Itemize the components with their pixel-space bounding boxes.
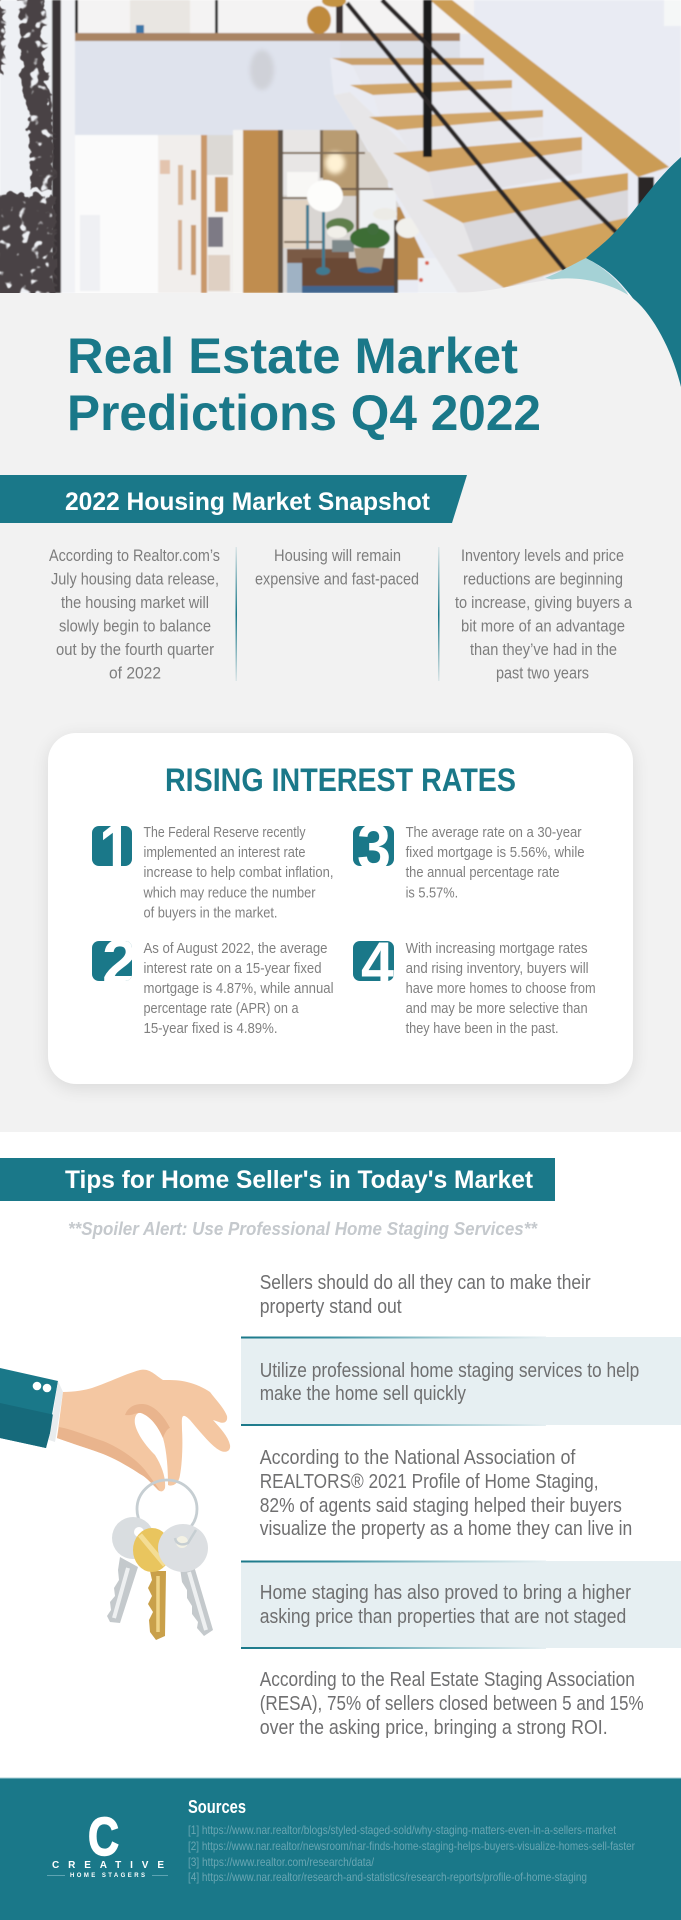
text item 4: they have been in the past. bbox=[406, 1020, 559, 1037]
logo: Creative Home Stagers: CREATIVE bbox=[52, 1860, 164, 1871]
tip 1 text: property stand out bbox=[260, 1296, 402, 1318]
snapshot column 1 text: July housing data release, bbox=[51, 570, 219, 588]
text item 1 bbox=[143, 824, 334, 922]
source list: [4] https://www.nar.realtor/research-and-statistics/research-reports/profile-of-home-staging bbox=[188, 1870, 587, 1884]
tip 5 text bbox=[260, 1669, 644, 1739]
tip 3 text: REALTORS® 2021 Profile of Home Staging, bbox=[260, 1471, 598, 1493]
source list bbox=[188, 1823, 635, 1884]
tip 1 text bbox=[260, 1272, 591, 1318]
text item 2: 15-year fixed is 4.89%. bbox=[144, 1020, 278, 1037]
snapshot column 3 text bbox=[455, 546, 632, 682]
snapshot column divider 2 bbox=[438, 547, 440, 681]
panel heading: RISING INTEREST RATES bbox=[165, 762, 516, 798]
tip 5 text: over the asking price, bringing a strong ROI. bbox=[260, 1717, 608, 1739]
snapshot column 2 text: expensive and fast-paced bbox=[255, 570, 419, 588]
tip 3 text: According to the National Association of bbox=[260, 1447, 576, 1469]
snapshot column 3 text: than they’ve had in the bbox=[470, 640, 617, 659]
text item 3 bbox=[406, 824, 585, 902]
snapshot column 2 text: Housing will remain bbox=[274, 546, 401, 565]
tip 2 highlighted strip: make the home sell quickly bbox=[260, 1383, 466, 1405]
text item 4: and may be more selective than bbox=[406, 1000, 588, 1017]
tip 5 text: According to the Real Estate Staging Association bbox=[260, 1669, 635, 1691]
section banner: 2022 Housing Market Snapshot: 2022 Housing Market Snapshot bbox=[65, 488, 431, 516]
icon: number 1: 1 bbox=[99, 810, 132, 890]
snapshot column 1 text: According to Realtor.com’s bbox=[49, 546, 220, 565]
text item 2: percentage rate (APR) on a bbox=[144, 1000, 299, 1017]
decorative teal wave bbox=[586, 157, 681, 390]
silver key left bbox=[107, 1517, 154, 1623]
text item 1: increase to help combat inflation, bbox=[144, 864, 334, 881]
icon: number 2: 2 bbox=[102, 928, 138, 997]
text item 2: As of August 2022, the average bbox=[144, 940, 328, 957]
icon: number 4: 4 bbox=[361, 930, 394, 999]
section banner: 2022 Housing Market Snapshot bbox=[0, 475, 467, 523]
icon: hand holding keys bbox=[0, 1368, 230, 1640]
silver key right bbox=[158, 1524, 213, 1636]
grey upper section background bbox=[0, 278, 681, 1132]
tip 3 text: visualize the property as a home they can live in bbox=[260, 1518, 632, 1540]
icon: number 3: 3 bbox=[357, 810, 391, 884]
tip 3 text bbox=[260, 1447, 632, 1540]
snapshot column 1 text: out by the fourth quarter bbox=[56, 640, 214, 659]
tip 3 text: 82% of agents said staging helped their buyers bbox=[260, 1495, 622, 1517]
text item 1: The Federal Reserve recently bbox=[144, 824, 306, 841]
section banner: tips for home sellers: Tips for Home Seller's in Today's Market bbox=[65, 1166, 534, 1194]
snapshot column 3 text: reductions are beginning bbox=[463, 570, 623, 588]
text item 4: With increasing mortgage rates bbox=[406, 940, 588, 957]
tip 4 highlighted strip bbox=[241, 1560, 681, 1649]
hand bbox=[57, 1370, 230, 1491]
panel: rising interest rates bbox=[48, 733, 633, 1088]
title bbox=[67, 328, 541, 441]
icon: number 3 bbox=[353, 826, 394, 866]
text item 1: of buyers in the market. bbox=[144, 904, 278, 922]
snapshot column 3 text: bit more of an advantage bbox=[461, 616, 625, 636]
spoiler alert subheading: **Spoiler Alert: Use Professional Home Staging Services** bbox=[68, 1219, 538, 1239]
title: Real Estate Market bbox=[67, 328, 518, 384]
snapshot column 1 text: of 2022 bbox=[109, 664, 161, 682]
text item 2: mortgage is 4.87%, while annual bbox=[144, 980, 334, 997]
hero photo: staircase interior bbox=[0, 0, 681, 300]
icon: number 2 bbox=[92, 941, 132, 981]
text item 4: and rising inventory, buyers will bbox=[406, 960, 589, 977]
snapshot column 3 text: Inventory levels and price bbox=[461, 546, 624, 565]
snapshot column divider 1 bbox=[236, 547, 237, 681]
tip 1 text: Sellers should do all they can to make their bbox=[260, 1272, 591, 1294]
sleeve bbox=[0, 1368, 63, 1448]
snapshot column 3 text: to increase, giving buyers a bbox=[455, 593, 632, 612]
snapshot column 1 text: the housing market will bbox=[61, 593, 209, 612]
snapshot column 3 text: past two years bbox=[496, 664, 589, 682]
text item 3: is 5.57%. bbox=[406, 884, 458, 902]
icon: number 4 bbox=[353, 941, 394, 981]
text item 2 bbox=[144, 940, 334, 1037]
text item 1: implemented an interest rate bbox=[144, 844, 306, 861]
gold key bbox=[133, 1528, 171, 1640]
sources heading: Sources bbox=[188, 1797, 246, 1817]
text item 2: interest rate on a 15-year fixed bbox=[144, 960, 322, 977]
text item 3: the annual percentage rate bbox=[406, 864, 560, 881]
snapshot column 1 text bbox=[49, 546, 220, 682]
snapshot column 2 text bbox=[255, 546, 419, 588]
title: Predictions Q4 2022 bbox=[67, 385, 541, 441]
icon: number 1 bbox=[92, 826, 132, 866]
footer panel bbox=[0, 1778, 681, 1920]
section banner: tips for home sellers bbox=[0, 1158, 555, 1201]
tip 2 highlighted strip bbox=[241, 1336, 681, 1426]
key ring bbox=[137, 1480, 197, 1538]
snapshot column 1 text: slowly begin to balance bbox=[59, 616, 211, 636]
logo: Creative Home Stagers bbox=[47, 1807, 168, 1879]
decorative light teal wave bbox=[545, 258, 632, 300]
source list: [3] https://www.realtor.com/research/data/ bbox=[188, 1855, 375, 1869]
logo: Creative Home Stagers: HOME STAGERS bbox=[70, 1873, 145, 1879]
text item 3: fixed mortgage is 5.56%, while bbox=[406, 844, 585, 861]
text item 4 bbox=[406, 940, 596, 1037]
tip 4 highlighted strip: Home staging has also proved to bring a higher bbox=[260, 1582, 631, 1604]
tip 4 highlighted strip: asking price than properties that are not staged bbox=[260, 1606, 626, 1628]
text item 1: which may reduce the number bbox=[143, 884, 316, 902]
text item 4: have more homes to choose from bbox=[406, 980, 596, 997]
logo: Creative Home Stagers: C bbox=[88, 1807, 119, 1867]
text item 3: The average rate on a 30-year bbox=[406, 824, 582, 841]
